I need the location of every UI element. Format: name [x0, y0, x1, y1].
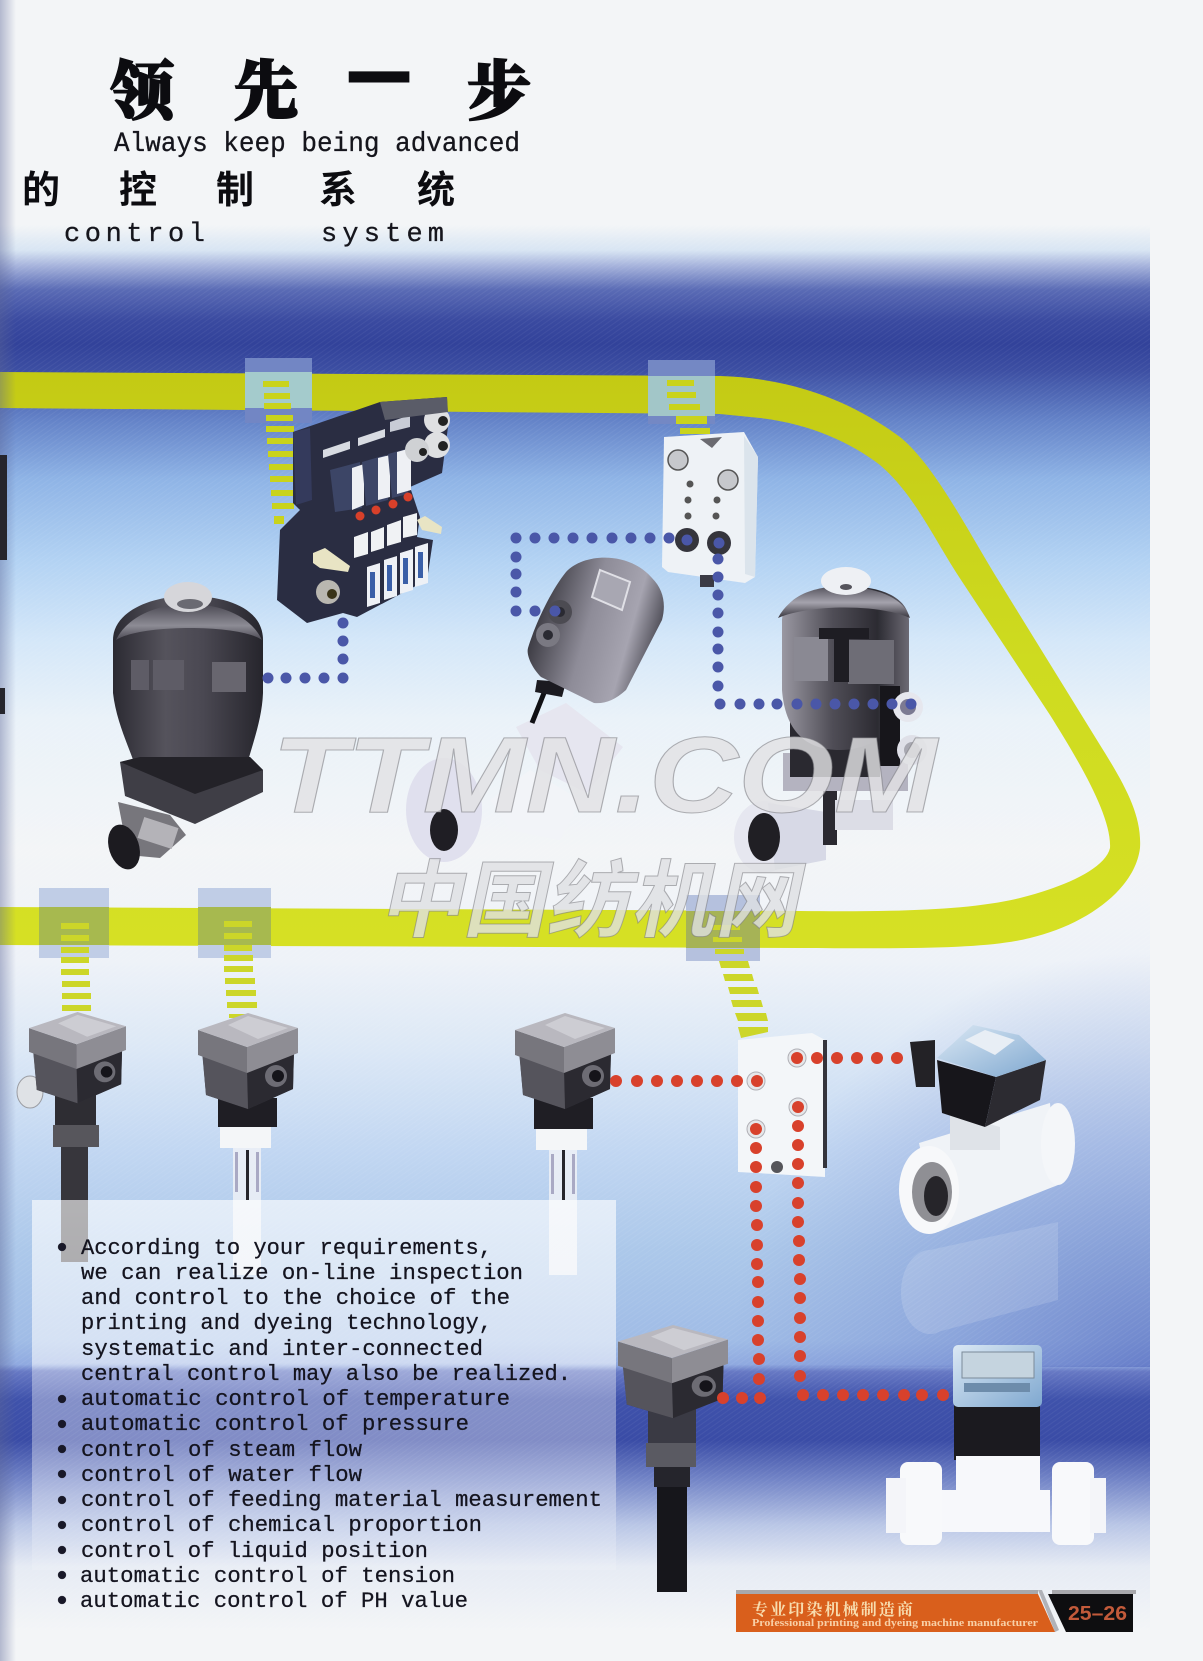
title: Chinese line 1: 步 [467, 41, 531, 133]
footer banner: orange: Professional printing and dyeing machine manufacturer [752, 1618, 1038, 1629]
text block: capabilities list: control of steam flow [81, 1438, 362, 1463]
title: Chinese line 2 [22, 159, 455, 214]
blue dotted connections [262, 532, 916, 710]
device: bus module with sockets [662, 432, 758, 587]
text backing panel [32, 1200, 616, 1570]
connector box with rungs 2 [648, 360, 715, 434]
device: white probe sensor [198, 1013, 298, 1275]
title: Chinese line 1: 先 [234, 41, 298, 133]
text block: capabilities list: automatic control of PH value [80, 1589, 468, 1614]
text block: capabilities list: systematic and inter-connected [81, 1337, 483, 1362]
device: diaphragm valve right [734, 567, 927, 873]
text block: capabilities list: automatic control of temperature [81, 1387, 510, 1412]
text block: capabilities list: control of water flow [81, 1463, 362, 1488]
device: black diaphragm valve left [103, 582, 263, 874]
footer banner: page number [1048, 1590, 1136, 1632]
scan gutter shadow [0, 0, 16, 1661]
device: angled valve with tilted actuator [406, 558, 664, 862]
title: Chinese line 2: 系 [319, 159, 357, 214]
device: white probe sensor with red link [515, 1013, 615, 1275]
device: hub block [738, 1033, 827, 1177]
footer banner: page number: 25–26 [1068, 1603, 1127, 1625]
text block: capabilities list: we can realize on-line inspection [81, 1261, 523, 1286]
connector box with rungs 5 [686, 895, 768, 1038]
title: English line 2: control [64, 220, 205, 250]
text block: capabilities list: control of chemical proportion [81, 1513, 482, 1538]
connector box with rungs 4 [198, 888, 271, 1018]
watermark: Chinese site name: 中国纺机网 [373, 833, 819, 955]
text block: capabilities list [58, 1236, 602, 1614]
title: Chinese line 2: 的 [22, 159, 60, 214]
text block: capabilities list: central control may also be realized. [81, 1362, 571, 1387]
title: English line 1: Always keep being advanced [114, 129, 520, 160]
text block: capabilities list: automatic control of tension [80, 1564, 455, 1589]
connector box with rungs 3 [39, 888, 109, 1011]
title: Chinese line 2: 制 [216, 159, 254, 214]
footer banner: orange: 专业印染机械制造商 [752, 1597, 913, 1620]
red dotted connections [610, 1052, 949, 1404]
text block: capabilities list: control of feeding material measurement [81, 1488, 602, 1513]
title: Chinese line 2: 统 [417, 159, 455, 214]
title: Chinese line 1: 一 [347, 29, 411, 121]
text block: capabilities list: According to your requirements, [81, 1236, 492, 1261]
title: Chinese line 1: 领 [110, 41, 178, 133]
device: solenoid valve manifold [277, 397, 450, 623]
device: flow sensor with threaded pipe [899, 1025, 1075, 1334]
text block: capabilities list: and control to the choice of the [81, 1286, 510, 1311]
title: Chinese line 1 [110, 29, 531, 133]
left edge cropped device [0, 455, 7, 714]
device: level sensor with long black probe [17, 1012, 126, 1262]
title: English line 2: system [321, 220, 444, 250]
watermark: TTMN.COM: TTMN.COM [272, 714, 939, 835]
device: magnetic flow meter [886, 1345, 1106, 1545]
title: Chinese line 2: 控 [119, 159, 157, 214]
title: English line 2 [64, 220, 444, 250]
text block: capabilities list: control of liquid position [81, 1539, 428, 1564]
device: level sensor lower left [618, 1325, 728, 1592]
yellow connection band [0, 372, 1140, 948]
text block: capabilities list: automatic control of pressure [81, 1412, 469, 1437]
text block: capabilities list: printing and dyeing technology, [81, 1311, 492, 1336]
footer banner: orange [736, 1590, 1059, 1632]
connector box with rungs 1 [245, 358, 312, 524]
